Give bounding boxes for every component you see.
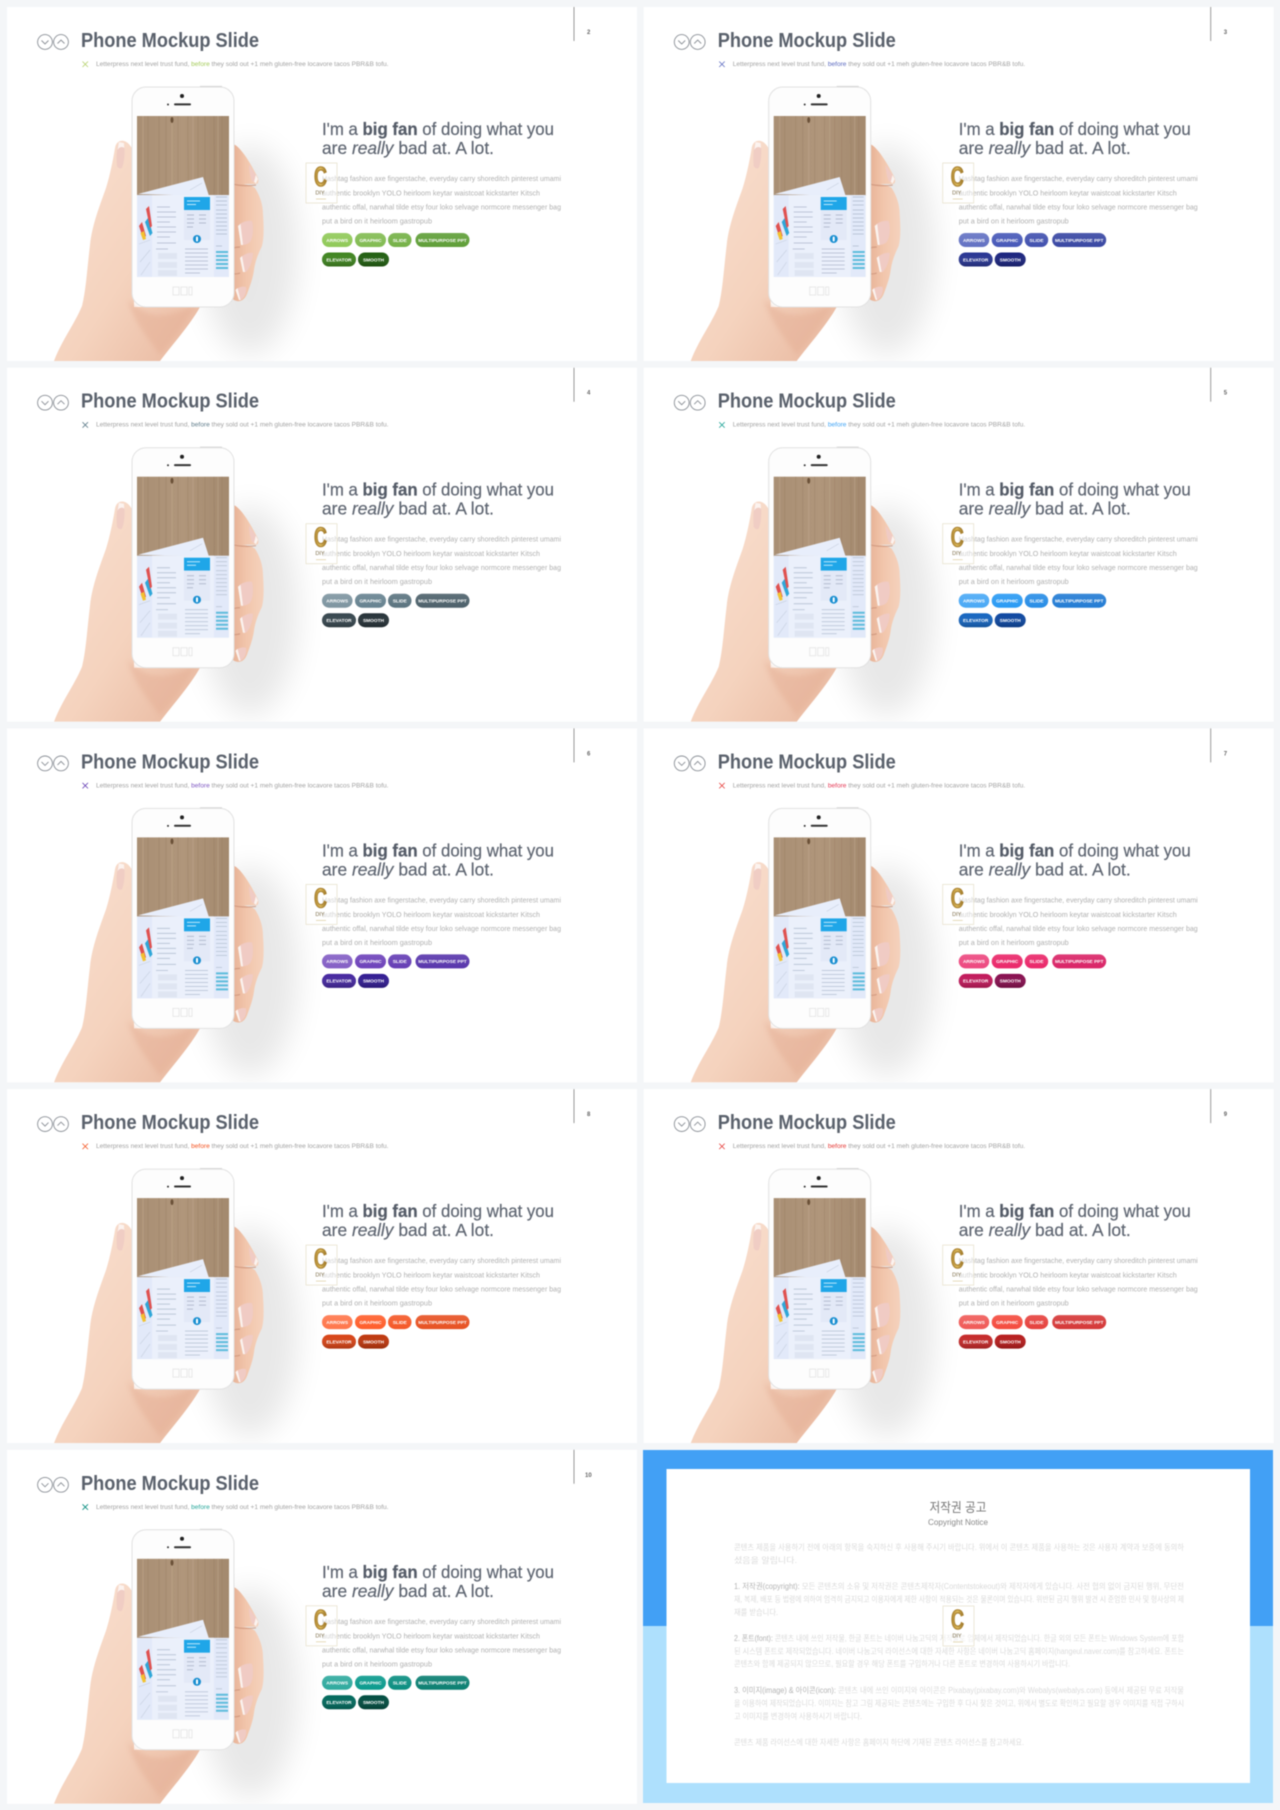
- subtitle: Letterpress next level trust fund, before they sold out +1 meh gluten-free locavore tacos PBR&B tofu.: [733, 782, 1025, 789]
- body paragraph: put a bird on it heirloom gastropub: [322, 577, 432, 586]
- body paragraph: [322, 174, 561, 226]
- notice item: image and icon: 3. 이미지(image) & 아이콘(icon): 콘텐츠 내에 쓰인 이미지와 아이콘은 Pixabay(pixabay.com)와 Webalys(webalys.com) 등에서 제공된 무료 저작물: [734, 1685, 1184, 1695]
- body paragraph: authentic offal, narwhal tilde etsy four loko selvage normcore messenger bag: [322, 924, 561, 933]
- tag pills: GRAPHIC: [996, 959, 1019, 965]
- panel: copyright notice: [643, 1450, 1273, 1803]
- body paragraph: authentic offal, narwhal tilde etsy four loko selvage normcore messenger bag: [322, 202, 561, 212]
- tag pills: ELEVATOR: [326, 979, 352, 985]
- tag pills: SLIDE: [393, 959, 408, 965]
- divider and page number: 2: [587, 30, 591, 36]
- body paragraph: authentic brooklyn YOLO heirloom keytar waistcoat kickstarter Kitsch: [322, 1631, 540, 1640]
- panel: slide 7 pink: [644, 728, 1274, 1082]
- illustration: hand holding phone: [54, 1169, 298, 1443]
- watermark logo: [306, 1604, 337, 1646]
- icon: cross mark: [82, 422, 88, 428]
- watermark logo: [306, 1243, 337, 1285]
- subtitle: Letterpress next level trust fund, before they sold out +1 meh gluten-free locavore tacos PBR&B tofu.: [96, 61, 389, 68]
- icon: navigation circles: [674, 395, 705, 410]
- icon: navigation circles: [38, 1117, 68, 1132]
- heading second line: are really bad at. A lot.: [959, 499, 1131, 519]
- tag pills: SLIDE: [393, 1320, 408, 1326]
- divider and page number: [574, 7, 591, 41]
- icon: cross mark: [719, 783, 725, 788]
- heading: I'm a big fan of doing what you: [959, 1201, 1191, 1221]
- tag pills: ARROWS: [963, 1320, 986, 1326]
- tag pills: ARROWS: [963, 238, 986, 244]
- tag pills: ELEVATOR: [963, 1339, 989, 1345]
- slide background: [7, 7, 637, 361]
- slide background: [7, 1089, 637, 1443]
- icon: navigation circles: [38, 1477, 68, 1492]
- illustration: hand holding phone: [54, 447, 298, 722]
- notice item: copyright: 재를 받습니다.: [734, 1607, 778, 1617]
- panel: slide 9 red: [644, 1089, 1274, 1443]
- divider and page number: [574, 1450, 592, 1484]
- illustration: hand holding phone: [691, 808, 935, 1082]
- notice item: copyright: 1. 저작권(copyright): 모든 콘텐츠의 소유 및 저작권은 콘텐츠제작자(Contentstokeout)와 제작자에게 있습니다. 사전 협의 없이 금지된 행위, 무단전: [734, 1581, 1184, 1591]
- tag pills: MULTIPURPOSE PPT: [418, 1681, 467, 1687]
- tag pills: SLIDE: [1029, 1320, 1044, 1326]
- heading second line: are really bad at. A lot.: [322, 138, 494, 158]
- heading second line: are really bad at. A lot.: [322, 1220, 494, 1240]
- tag pills: ARROWS: [326, 238, 349, 244]
- tag pills: MULTIPURPOSE PPT: [1055, 1320, 1103, 1326]
- heading second line: are really bad at. A lot.: [959, 859, 1131, 879]
- tag pills: [322, 233, 470, 266]
- body paragraph: [322, 895, 561, 947]
- icon: navigation circles: [674, 1117, 705, 1132]
- illustration: hand holding phone: [54, 1529, 298, 1804]
- body paragraph: [322, 535, 561, 586]
- illustration: hand holding phone: [691, 86, 935, 361]
- tag pills: SMOOTH: [1000, 979, 1021, 985]
- icon: cross mark: [82, 1504, 88, 1510]
- divider and page number: [1211, 1089, 1228, 1123]
- slide title: Phone Mockup Slide: [718, 30, 896, 52]
- body paragraph: put a bird on it heirloom gastropub: [322, 1299, 432, 1308]
- icon: cross mark: [82, 1144, 88, 1149]
- body paragraph: authentic brooklyn YOLO heirloom keytar waistcoat kickstarter Kitsch: [959, 910, 1177, 919]
- notice intro: 셨음을 알립니다.: [734, 1555, 797, 1565]
- tag pills: ELEVATOR: [326, 257, 352, 263]
- tag pills: GRAPHIC: [996, 238, 1019, 244]
- divider and page number: [574, 728, 591, 762]
- body paragraph: authentic offal, narwhal tilde etsy four loko selvage normcore messenger bag: [322, 563, 561, 572]
- tag pills: [322, 594, 470, 627]
- panel: slide 8 orange: [7, 1089, 637, 1443]
- body paragraph: put a bird on it heirloom gastropub: [322, 216, 432, 226]
- notice item: image and icon: [734, 1685, 1184, 1721]
- divider and page number: 10: [585, 1473, 592, 1479]
- tag pills: SLIDE: [1029, 959, 1044, 965]
- body paragraph: put a bird on it heirloom gastropub: [959, 577, 1069, 586]
- tag pills: SMOOTH: [1000, 1339, 1021, 1345]
- tag pills: ELEVATOR: [326, 1700, 352, 1706]
- body paragraph: Hashtag fashion axe fingerstache, everyday carry shoreditch pinterest umami: [959, 1256, 1198, 1265]
- watermark logo: [306, 522, 337, 564]
- tag pills: SLIDE: [393, 599, 408, 605]
- slide title: Phone Mockup Slide: [718, 1112, 896, 1134]
- body paragraph: put a bird on it heirloom gastropub: [959, 216, 1069, 226]
- divider and page number: 8: [587, 1112, 591, 1118]
- watermark logo: [943, 1243, 974, 1285]
- tag pills: ARROWS: [326, 1681, 349, 1687]
- tag pills: ARROWS: [326, 959, 349, 965]
- body paragraph: put a bird on it heirloom gastropub: [322, 1659, 432, 1668]
- white notice card: [666, 1469, 1250, 1783]
- icon: navigation circles: [38, 35, 68, 49]
- body paragraph: [322, 1617, 561, 1668]
- tag pills: ARROWS: [963, 599, 986, 605]
- icon: navigation circles: [674, 35, 705, 49]
- body paragraph: Hashtag fashion axe fingerstache, everyday carry shoreditch pinterest umami: [322, 1256, 561, 1265]
- body paragraph: authentic offal, narwhal tilde etsy four loko selvage normcore messenger bag: [322, 1645, 561, 1654]
- heading: I'm a big fan of doing what you: [322, 1562, 554, 1582]
- tag pills: ELEVATOR: [963, 257, 989, 263]
- slide background: [644, 368, 1274, 722]
- tag pills: SMOOTH: [363, 257, 385, 263]
- divider and page number: 5: [1224, 391, 1228, 397]
- body paragraph: Hashtag fashion axe fingerstache, everyday carry shoreditch pinterest umami: [322, 895, 561, 904]
- watermark logo: [943, 161, 974, 203]
- tag pills: ELEVATOR: [963, 618, 989, 624]
- body paragraph: Hashtag fashion axe fingerstache, everyday carry shoreditch pinterest umami: [959, 535, 1198, 544]
- divider and page number: 6: [587, 751, 591, 757]
- body paragraph: Hashtag fashion axe fingerstache, everyday carry shoreditch pinterest umami: [959, 895, 1198, 904]
- divider and page number: [1211, 728, 1228, 762]
- tag pills: SMOOTH: [1000, 257, 1021, 263]
- panel: slide 2 green: [7, 7, 637, 361]
- icon: navigation circles: [38, 756, 68, 771]
- icon: cross mark: [719, 62, 725, 67]
- body paragraph: [959, 1256, 1198, 1308]
- slide background: [644, 1089, 1274, 1443]
- heading second line: are really bad at. A lot.: [959, 1220, 1131, 1240]
- notice subtitle: Copyright Notice: [928, 1517, 988, 1527]
- tag pills: [959, 1315, 1107, 1349]
- heading: I'm a big fan of doing what you: [959, 119, 1191, 139]
- tag pills: [959, 233, 1107, 266]
- divider and page number: 4: [587, 391, 591, 397]
- subtitle: Letterpress next level trust fund, before they sold out +1 meh gluten-free locavore tacos PBR&B tofu.: [96, 1143, 389, 1150]
- tag pills: GRAPHIC: [359, 959, 382, 965]
- notice title: 저작권 공고: [930, 1500, 987, 1515]
- tag pills: MULTIPURPOSE PPT: [418, 1320, 467, 1326]
- divider and page number: [1211, 7, 1228, 41]
- body paragraph: [959, 895, 1198, 947]
- body paragraph: put a bird on it heirloom gastropub: [322, 938, 432, 947]
- tag pills: SLIDE: [393, 1681, 408, 1687]
- notice item: font: 2. 폰트(font): 콘텐츠 내에 쓰인 저작물, 한글 폰트는 네이버 나눔고딕의 저작물로 업체에서 제작되었습니다. 한글 외의 모든 폰트는 Windows System에 포함: [734, 1633, 1185, 1643]
- tag pills: GRAPHIC: [996, 599, 1019, 605]
- tag pills: SMOOTH: [363, 1700, 385, 1706]
- icon: navigation circles: [38, 395, 68, 410]
- slide title: Phone Mockup Slide: [81, 391, 259, 413]
- illustration: hand holding phone: [691, 447, 935, 722]
- panel: slide 4 blue grey: [7, 368, 637, 722]
- slide background: [644, 728, 1274, 1082]
- tag pills: [959, 954, 1107, 988]
- body paragraph: Hashtag fashion axe fingerstache, everyday carry shoreditch pinterest umami: [322, 1617, 561, 1626]
- heading: I'm a big fan of doing what you: [322, 119, 554, 139]
- body paragraph: Hashtag fashion axe fingerstache, everyday carry shoreditch pinterest umami: [959, 174, 1198, 183]
- panel: slide 10 teal: [7, 1450, 637, 1804]
- divider and page number: 7: [1224, 751, 1228, 757]
- body paragraph: [959, 535, 1198, 586]
- illustration: hand holding phone: [54, 86, 298, 361]
- notice item: font: [734, 1633, 1185, 1668]
- body paragraph: authentic offal, narwhal tilde etsy four loko selvage normcore messenger bag: [959, 924, 1198, 933]
- tag pills: SMOOTH: [363, 618, 385, 624]
- body paragraph: authentic brooklyn YOLO heirloom keytar waistcoat kickstarter Kitsch: [322, 1271, 540, 1280]
- tag pills: GRAPHIC: [359, 599, 382, 605]
- tag pills: [322, 1315, 470, 1349]
- panel: slide 6 purple: [7, 728, 637, 1082]
- slide title: Phone Mockup Slide: [81, 1112, 259, 1134]
- heading: I'm a big fan of doing what you: [959, 840, 1191, 860]
- panel: slide 3 indigo: [644, 7, 1274, 361]
- subtitle: Letterpress next level trust fund, before they sold out +1 meh gluten-free locavore tacos PBR&B tofu.: [96, 1504, 389, 1511]
- body paragraph: authentic brooklyn YOLO heirloom keytar waistcoat kickstarter Kitsch: [322, 549, 540, 558]
- slide background: [7, 1450, 637, 1804]
- tag pills: ARROWS: [326, 599, 349, 605]
- heading second line: are really bad at. A lot.: [322, 499, 494, 519]
- tag pills: MULTIPURPOSE PPT: [418, 599, 467, 605]
- divider and page number: [574, 368, 591, 402]
- heading: I'm a big fan of doing what you: [322, 840, 554, 860]
- body paragraph: authentic brooklyn YOLO heirloom keytar waistcoat kickstarter Kitsch: [959, 549, 1177, 558]
- illustration: hand holding phone: [691, 1169, 935, 1443]
- heading: I'm a big fan of doing what you: [959, 480, 1191, 500]
- body paragraph: authentic offal, narwhal tilde etsy four loko selvage normcore messenger bag: [959, 563, 1198, 572]
- slide background: [7, 368, 637, 722]
- notice intro: [734, 1542, 1185, 1565]
- watermark logo: [943, 1604, 974, 1646]
- notice item: image and icon: 을 이용하여 제작되었습니다. 이미지는 참고 그림 제공되는 콘텐츠에는 구입한 후 다시 찾은 것이고, 위에서 별도로 확인하고 필요할 경우 이미지를 직접 구하시: [734, 1698, 1184, 1708]
- tag pills: ELEVATOR: [963, 979, 989, 985]
- tag pills: MULTIPURPOSE PPT: [1055, 599, 1103, 605]
- tag pills: SMOOTH: [363, 1339, 385, 1345]
- subtitle: Letterpress next level trust fund, before they sold out +1 meh gluten-free locavore tacos PBR&B tofu.: [96, 782, 389, 789]
- slide title: Phone Mockup Slide: [81, 30, 259, 52]
- body paragraph: Hashtag fashion axe fingerstache, everyday carry shoreditch pinterest umami: [322, 174, 561, 183]
- slide title: Phone Mockup Slide: [718, 751, 896, 773]
- slide background: [644, 7, 1274, 361]
- tag pills: SMOOTH: [1000, 618, 1021, 624]
- body paragraph: authentic offal, narwhal tilde etsy four loko selvage normcore messenger bag: [959, 202, 1198, 212]
- body paragraph: [322, 1256, 561, 1308]
- divider and page number: [574, 1089, 591, 1123]
- notice item: copyright: [734, 1581, 1184, 1617]
- slide title: Phone Mockup Slide: [718, 391, 896, 413]
- slide title: Phone Mockup Slide: [81, 1473, 259, 1495]
- icon: cross mark: [82, 62, 88, 67]
- tag pills: GRAPHIC: [359, 1681, 382, 1687]
- notice closing line: 콘텐츠 제품 라이선스에 대한 자세한 사항은 홈페이지 하단에 기재된 콘텐츠 라이선스를 참고하세요.: [734, 1737, 1024, 1747]
- tag pills: ELEVATOR: [326, 618, 352, 624]
- heading second line: are really bad at. A lot.: [959, 138, 1131, 158]
- notice intro: 콘텐츠 제품을 사용하기 전에 아래의 항목을 숙지하신 후 사용해 주시기 바랍니다. 위에서 이 콘텐츠 제품을 사용하는 것은 사용자 계약과 보증에 동의하: [734, 1542, 1185, 1552]
- subtitle: Letterpress next level trust fund, before they sold out +1 meh gluten-free locavore tacos PBR&B tofu.: [733, 61, 1025, 68]
- divider and page number: 3: [1224, 30, 1228, 36]
- tag pills: MULTIPURPOSE PPT: [418, 959, 467, 965]
- heading second line: are really bad at. A lot.: [322, 1581, 494, 1601]
- subtitle: Letterpress next level trust fund, before they sold out +1 meh gluten-free locavore tacos PBR&B tofu.: [733, 422, 1025, 429]
- tag pills: SLIDE: [1029, 599, 1044, 605]
- tag pills: SMOOTH: [363, 979, 385, 985]
- divider and page number: 9: [1224, 1112, 1228, 1118]
- body paragraph: Hashtag fashion axe fingerstache, everyday carry shoreditch pinterest umami: [322, 535, 561, 544]
- tag pills: ARROWS: [963, 959, 986, 965]
- watermark logo: [943, 882, 974, 924]
- watermark logo: [306, 161, 337, 203]
- heading: I'm a big fan of doing what you: [322, 480, 554, 500]
- subtitle: Letterpress next level trust fund, before they sold out +1 meh gluten-free locavore tacos PBR&B tofu.: [733, 1143, 1025, 1150]
- tag pills: MULTIPURPOSE PPT: [1055, 238, 1103, 244]
- tag pills: ARROWS: [326, 1320, 349, 1326]
- body paragraph: [959, 174, 1198, 226]
- tag pills: ELEVATOR: [326, 1339, 352, 1345]
- heading: I'm a big fan of doing what you: [322, 1201, 554, 1221]
- icon: cross mark: [719, 422, 725, 428]
- body paragraph: authentic brooklyn YOLO heirloom keytar waistcoat kickstarter Kitsch: [959, 188, 1177, 198]
- body paragraph: authentic brooklyn YOLO heirloom keytar waistcoat kickstarter Kitsch: [322, 188, 540, 198]
- tag pills: SLIDE: [1029, 238, 1044, 244]
- icon: navigation circles: [674, 756, 705, 771]
- blue upper background: [643, 1450, 1273, 1626]
- notice item: image and icon: 고 이미지를 변경하여 사용하시기 바랍니다.: [734, 1711, 862, 1721]
- illustration: hand holding phone: [54, 808, 298, 1082]
- tag pills: GRAPHIC: [359, 1320, 382, 1326]
- tag pills: GRAPHIC: [359, 238, 382, 244]
- watermark logo: [943, 522, 974, 564]
- divider and page number: [1211, 368, 1228, 402]
- body paragraph: authentic offal, narwhal tilde etsy four loko selvage normcore messenger bag: [322, 1285, 561, 1294]
- icon: cross mark: [82, 783, 88, 788]
- tag pills: MULTIPURPOSE PPT: [1055, 959, 1103, 965]
- tag pills: SLIDE: [393, 238, 408, 244]
- body paragraph: authentic offal, narwhal tilde etsy four loko selvage normcore messenger bag: [959, 1285, 1198, 1294]
- body paragraph: put a bird on it heirloom gastropub: [959, 1299, 1069, 1308]
- notice item: copyright: 재, 복제, 배포 등 법령에 의하여 엄격히 금지되고 이용자에게 제한 사항이 적용되는 것은 물론이며 있습니다. 위반된 금지 행위 발견 시 준엄한 민사 및 형사상의 제: [734, 1594, 1184, 1604]
- notice item: font: 콘텐츠와 함께 제공되지 않으므로, 필요할 경우 해당 폰트를 구입하거나 다른 폰트로 변경하여 사용하시기 바랍니다.: [734, 1658, 1070, 1668]
- notice item: font: 된 시스템 폰트로 제작되었습니다. 네이버 나눔고딕 라이선스에 대한 자세한 사항은 네이버 나눔고딕 홈페이지(hangeul.naver.com)를 참고하세요. 폰트는: [734, 1646, 1184, 1656]
- body paragraph: put a bird on it heirloom gastropub: [959, 938, 1069, 947]
- tag pills: [322, 1676, 470, 1709]
- tag pills: GRAPHIC: [996, 1320, 1019, 1326]
- slide title: Phone Mockup Slide: [81, 751, 259, 773]
- panel: slide 5 blue: [644, 368, 1274, 722]
- tag pills: [322, 954, 470, 988]
- slide background: [7, 728, 637, 1082]
- tag pills: MULTIPURPOSE PPT: [418, 238, 467, 244]
- subtitle: Letterpress next level trust fund, before they sold out +1 meh gluten-free locavore tacos PBR&B tofu.: [96, 422, 389, 429]
- body paragraph: authentic brooklyn YOLO heirloom keytar waistcoat kickstarter Kitsch: [322, 910, 540, 919]
- tag pills: [959, 594, 1107, 627]
- icon: cross mark: [719, 1144, 725, 1149]
- light blue lower background: [643, 1626, 1273, 1803]
- heading second line: are really bad at. A lot.: [322, 859, 494, 879]
- body paragraph: authentic brooklyn YOLO heirloom keytar waistcoat kickstarter Kitsch: [959, 1271, 1177, 1280]
- watermark logo: [306, 882, 337, 924]
